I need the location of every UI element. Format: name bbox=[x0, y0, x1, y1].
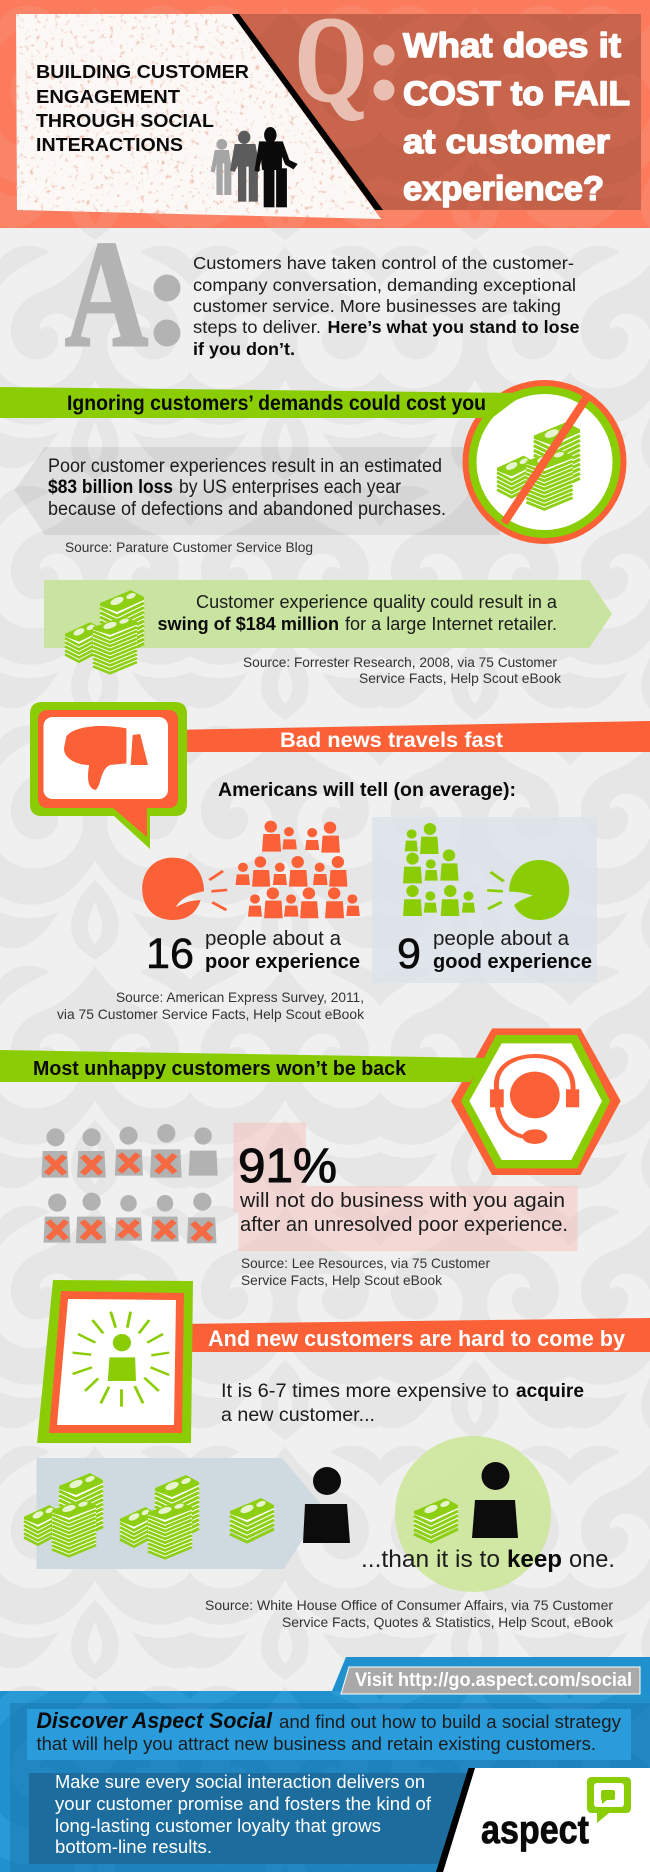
aspect logo panel: aspect bbox=[481, 1808, 589, 1852]
dark overlay panel bbox=[10, 1703, 650, 1872]
loss statistic text: by US enterprises each year bbox=[179, 477, 402, 498]
swing statistic text: Customer experience quality could result in a bbox=[196, 591, 558, 612]
discover panel: and find out how to build a social strategy bbox=[279, 1711, 622, 1732]
section 1 banner bbox=[0, 387, 525, 418]
acquire text: It is 6-7 times more expensive to bbox=[221, 1380, 509, 1402]
answer text: Here’s what you stand to lose bbox=[328, 317, 580, 337]
gray arrow panel bbox=[14, 447, 500, 535]
keep circle bbox=[395, 1436, 551, 1592]
white torn title panel bbox=[16, 14, 381, 219]
answer text bbox=[193, 253, 580, 359]
statistic: 16 people: people about a bbox=[205, 927, 342, 950]
swing statistic text: swing of $184 million bbox=[158, 613, 339, 634]
question heading: at customer bbox=[403, 123, 610, 161]
keep text: keep bbox=[507, 1546, 562, 1573]
promise panel: Make sure every social interaction delivers on bbox=[55, 1771, 425, 1792]
question heading: experience? bbox=[403, 170, 604, 208]
loss statistic text: $83 billion loss bbox=[48, 477, 173, 498]
icon: no money bbox=[462, 380, 626, 544]
subtitle: ENGAGEMENT bbox=[36, 87, 180, 107]
icon: green talking head with 9 people bbox=[403, 823, 569, 920]
promise panel: bottom-line results. bbox=[55, 1836, 212, 1857]
discover panel bbox=[27, 1708, 631, 1760]
logo speech bubble bbox=[587, 1777, 631, 1823]
icon: three silhouettes bbox=[211, 127, 298, 207]
statistic: 16 people: 16 bbox=[146, 930, 194, 978]
subtitle: INTERACTIONS bbox=[36, 135, 183, 155]
discover panel: that will help you attract new business and retain existing customers. bbox=[36, 1733, 596, 1754]
answer text: steps to deliver. bbox=[193, 317, 321, 337]
icon: headset hexagon bbox=[451, 1028, 621, 1175]
answer text: Customers have taken control of the customer- bbox=[193, 253, 574, 273]
promise panel: long-lasting customer loyalty that grows bbox=[55, 1815, 381, 1836]
source: Service Facts, Help Scout eBook bbox=[359, 670, 562, 686]
source bbox=[243, 654, 562, 686]
green arrow panel bbox=[44, 580, 612, 648]
promise panel bbox=[29, 1771, 470, 1864]
source bbox=[241, 1255, 490, 1288]
91% statistic bbox=[238, 1140, 568, 1236]
statistic: 16 people bbox=[146, 927, 360, 978]
source: Source: Forrester Research, 2008, via 75 Customer bbox=[243, 654, 557, 670]
statistic: 9 people: 9 bbox=[397, 930, 421, 978]
section 1 banner: Ignoring customers’ demands could cost you bbox=[67, 392, 486, 415]
icon: money to acquire bbox=[24, 1473, 274, 1558]
question heading bbox=[403, 27, 630, 208]
footer bbox=[0, 1657, 650, 1872]
question heading: What does it bbox=[403, 27, 621, 65]
keep text: one. bbox=[569, 1546, 615, 1573]
91% statistic: after an unresolved poor experience. bbox=[240, 1213, 568, 1236]
section 2 banner bbox=[170, 721, 650, 752]
promise panel: your customer promise and fosters the kind of bbox=[55, 1793, 432, 1814]
visit button: Visit http://go.aspect.com/social bbox=[355, 1670, 632, 1691]
keep text bbox=[361, 1546, 615, 1573]
acquire text bbox=[221, 1380, 584, 1426]
subheading: Americans will tell (on average): bbox=[218, 779, 516, 801]
acquire text: acquire bbox=[516, 1380, 584, 1402]
source: Source: White House Office of Consumer Affairs, via 75 Customer bbox=[205, 1597, 613, 1613]
subtitle bbox=[36, 62, 249, 155]
black diagonal bbox=[232, 14, 383, 210]
icon: red talking head with 16 people bbox=[142, 821, 360, 920]
acquire arrow panel bbox=[36, 1458, 323, 1569]
answer text: customer service. More businesses are taking bbox=[193, 296, 561, 316]
source bbox=[205, 1597, 614, 1630]
subtitle: BUILDING CUSTOMER bbox=[36, 62, 249, 82]
icon: highlighted person frame bbox=[37, 1280, 193, 1443]
swing statistic text: for a large Internet retailer. bbox=[345, 613, 557, 634]
subtitle: THROUGH SOCIAL bbox=[36, 111, 214, 131]
icon: money stacks bbox=[65, 590, 144, 673]
keep text: ...than it is to bbox=[361, 1546, 500, 1573]
swing statistic text bbox=[158, 591, 558, 634]
91% statistic: will not do business with you again bbox=[239, 1189, 565, 1212]
good panel bbox=[372, 817, 597, 983]
icon: black person acquire bbox=[303, 1467, 350, 1543]
source bbox=[57, 989, 365, 1022]
loss statistic text: because of defections and abandoned purchases. bbox=[48, 499, 446, 520]
source: Source: Parature Customer Service Blog bbox=[65, 539, 313, 555]
icon: keep customer bbox=[414, 1462, 518, 1542]
acquire text: a new customer... bbox=[221, 1404, 375, 1426]
source: via 75 Customer Service Facts, Help Scout eBook bbox=[57, 1006, 365, 1022]
91% statistic: 91% bbox=[238, 1140, 337, 1193]
source: Service Facts, Help Scout eBook bbox=[241, 1272, 443, 1288]
loss statistic text: Poor customer experiences result in an estimated bbox=[48, 456, 442, 477]
section 4 banner: And new customers are hard to come by bbox=[208, 1326, 626, 1351]
aspect logo panel bbox=[436, 1768, 650, 1872]
A:: A bbox=[65, 210, 148, 378]
statistic: 9 people: good experience bbox=[433, 951, 592, 973]
source: Source: American Express Survey, 2011, bbox=[116, 989, 364, 1005]
source: Service Facts, Quotes & Statistics, Help Scout, eBook bbox=[282, 1614, 614, 1630]
icon: speech bubble thumbs down bbox=[30, 702, 187, 849]
section 2 banner: Bad news travels fast bbox=[280, 729, 503, 752]
statistic: 16 people: poor experience bbox=[205, 951, 360, 973]
discover panel: Discover Aspect Social bbox=[36, 1708, 273, 1733]
section 3 banner bbox=[0, 1050, 488, 1082]
section 4 banner bbox=[180, 1318, 650, 1352]
statistic: 9 people bbox=[397, 927, 592, 978]
loss statistic text bbox=[48, 456, 446, 520]
question panel background bbox=[239, 14, 641, 210]
question heading: COST to FAIL bbox=[403, 75, 630, 113]
answer text: company conversation, demanding exceptional bbox=[193, 275, 576, 295]
answer text: if you don’t. bbox=[193, 339, 295, 359]
source: Source: Lee Resources, via 75 Customer bbox=[241, 1255, 490, 1271]
header banner bbox=[0, 0, 650, 228]
icon: ten customers, nine crossed out bbox=[41, 1124, 218, 1243]
statistic: 9 people: people about a bbox=[433, 927, 570, 950]
section 3 banner: Most unhappy customers won’t be back bbox=[33, 1057, 407, 1080]
pink highlight panels bbox=[233, 1123, 578, 1251]
